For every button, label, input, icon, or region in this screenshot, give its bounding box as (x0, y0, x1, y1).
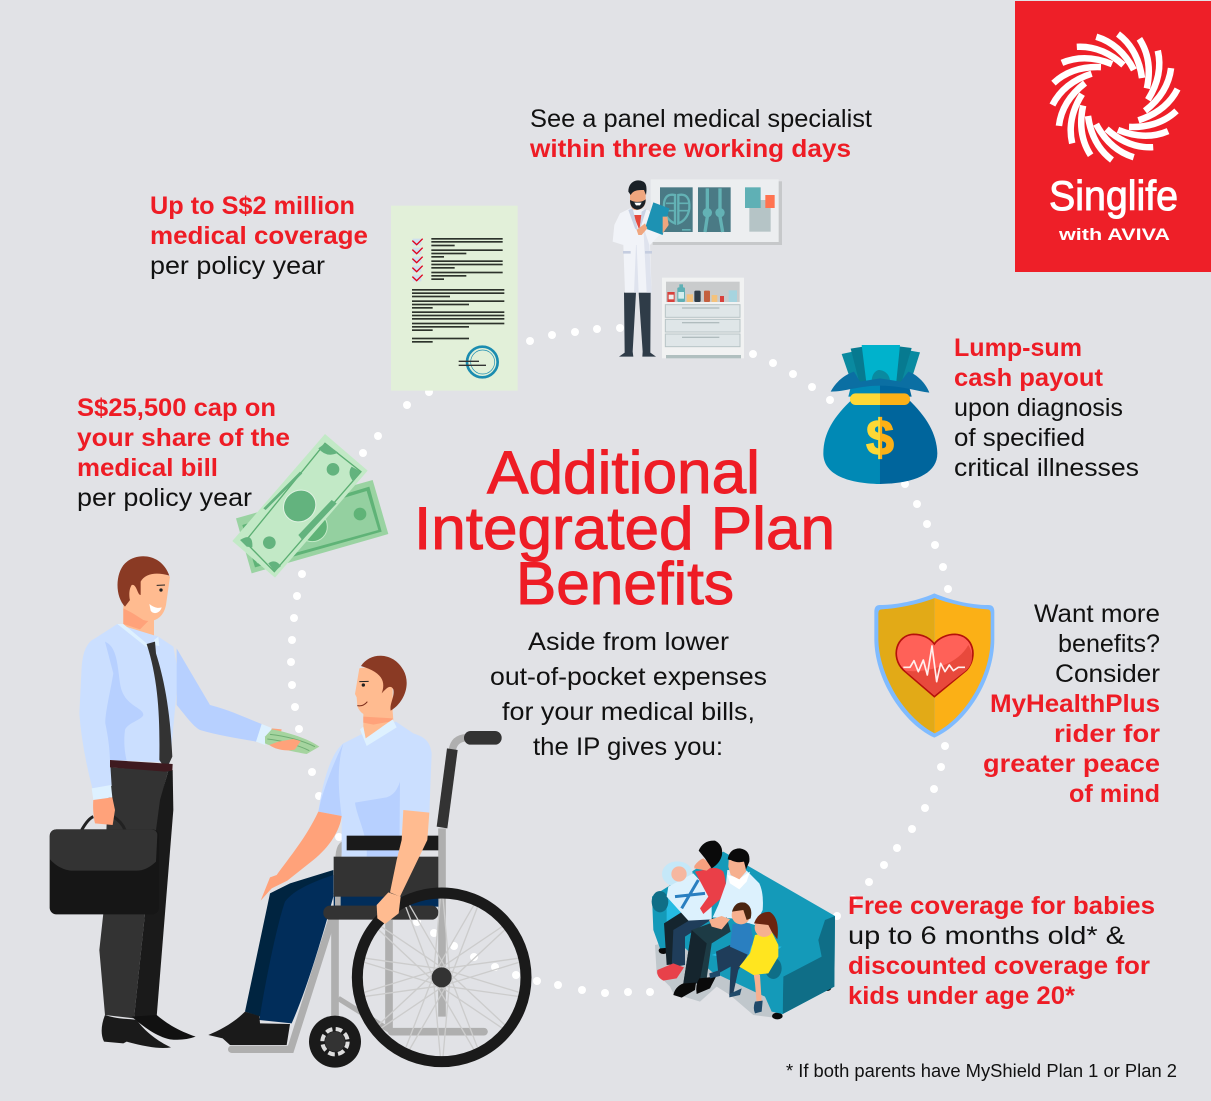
title (414, 439, 835, 617)
text: cap on medical bill: S$25,500 cap on (77, 394, 276, 422)
wheelchair user head (355, 656, 407, 746)
title: Additional (487, 439, 760, 506)
text: MyHealthPlus rider: greater peace (983, 750, 1160, 778)
logo wordmark (1049, 172, 1178, 244)
text: cap on medical bill: per policy year (77, 484, 252, 512)
text: MyHealthPlus rider: benefits? (1058, 630, 1160, 658)
text: lump-sum payout: critical illnesses (954, 454, 1139, 482)
doctor figure (613, 180, 669, 357)
text: MyHealthPlus rider: rider for (1054, 720, 1160, 748)
text: lump-sum payout: Lump-sum (954, 334, 1082, 362)
logo wordmark: Singlife (1049, 172, 1178, 219)
intro text: out-of-pocket expenses (490, 663, 767, 691)
father (673, 848, 763, 998)
sofa (652, 852, 835, 1019)
footnote: * If both parents have MyShield Plan 1 or Plan 2 (786, 1061, 1177, 1081)
illustration: man in wheelchair (208, 656, 526, 1068)
girl (739, 912, 778, 1013)
text: coverage for babies and kids: Free coverage for babies (848, 892, 1155, 920)
text: MyHealthPlus rider (983, 600, 1160, 808)
logo wordmark: with AVIVA (1058, 225, 1170, 244)
text: coverage for babies and kids: discounted coverage for (848, 952, 1150, 980)
text: medical coverage benefit: per policy year (150, 252, 325, 280)
text: lump-sum payout: cash payout (954, 364, 1104, 392)
title: Benefits (516, 550, 734, 617)
medicine cabinet (662, 278, 744, 358)
text: medical coverage benefit (150, 192, 368, 280)
text: coverage for babies and kids: up to 6 months old* & (848, 922, 1125, 950)
text: coverage for babies and kids: kids under age 20* (848, 982, 1075, 1010)
intro text: the IP gives you: (533, 733, 723, 761)
intro text: Aside from lower (528, 628, 729, 656)
icon: policy document (391, 206, 518, 391)
text: lump-sum payout (954, 334, 1139, 482)
text: MyHealthPlus rider: MyHealthPlus (990, 690, 1160, 718)
large wheel (357, 893, 526, 1062)
x-ray wall panel (651, 179, 782, 245)
wheelchair user legs (208, 836, 438, 1045)
dotted path connecting benefits (287, 324, 952, 997)
checklist ticks (412, 239, 423, 281)
intro text (490, 628, 767, 761)
text: cap on medical bill: medical bill (77, 454, 218, 482)
text: medical coverage benefit: medical coverage (150, 222, 368, 250)
icon: shield with heart (874, 593, 994, 738)
text: MyHealthPlus rider: Consider (1055, 660, 1160, 688)
text: lump-sum payout: of specified (954, 424, 1085, 452)
icon: Singlife swirl (1047, 29, 1183, 165)
standing man legs (99, 767, 196, 1048)
icon: money bag: $ (866, 410, 894, 466)
standing man head (117, 556, 170, 640)
text: cap on medical bill: your share of the (77, 424, 290, 452)
illustration: man handing over cash (50, 556, 319, 1048)
heading: specialist benefit (529, 105, 872, 163)
icon: doctor with x-rays and cabinet (613, 179, 782, 358)
wheelchair user shirt (318, 722, 432, 857)
text: cap on medical bill (77, 394, 290, 512)
wheelchair user arms (261, 812, 342, 901)
text: medical coverage benefit: Up to S$2 million (150, 192, 355, 220)
forearm and hand on wheel (377, 810, 429, 924)
heading: specialist benefit: See a panel medical specialist (530, 105, 872, 133)
small wheel (309, 1016, 361, 1068)
heading: specialist benefit: within three working days (529, 135, 851, 163)
icon: money bills (232, 434, 388, 578)
wheelchair frame (232, 731, 502, 1049)
standing man shirt and arm (79, 624, 273, 800)
logo panel (1015, 1, 1211, 272)
document text lines (412, 238, 504, 343)
text: MyHealthPlus rider: Want more (1034, 600, 1160, 628)
title: Integrated Plan (414, 495, 835, 562)
intro text: for your medical bills, (502, 698, 755, 726)
boy (709, 902, 753, 997)
seal stamp (459, 347, 498, 377)
icon: money bag (823, 345, 937, 484)
text: lump-sum payout: upon diagnosis (954, 394, 1123, 422)
hand with cash (265, 728, 319, 754)
illustration: family on sofa (652, 841, 835, 1019)
text: MyHealthPlus rider: of mind (1069, 780, 1160, 808)
briefcase (50, 797, 159, 914)
text: coverage for babies and kids (848, 892, 1155, 1010)
mother and baby (657, 841, 726, 981)
